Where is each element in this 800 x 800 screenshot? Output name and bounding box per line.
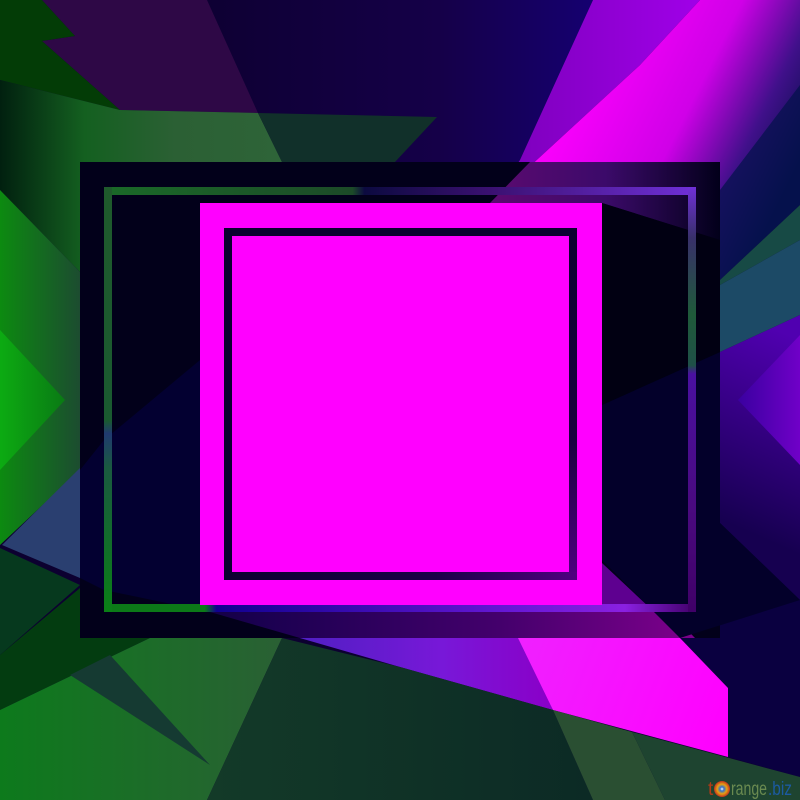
frame lower right purple wedge (602, 563, 650, 608)
lower left dark shard (0, 548, 80, 655)
frame navy diagonal right (602, 352, 800, 638)
top purple shard (490, 0, 700, 203)
top green band (0, 80, 282, 272)
bottom right green shard (632, 732, 800, 800)
bottom left green panel (0, 638, 282, 800)
frame navy diagonal left (80, 360, 200, 610)
lower purple band (210, 612, 553, 710)
lower right navy panel (680, 523, 800, 777)
right blue-green band (720, 240, 800, 352)
right teal shard (720, 205, 800, 285)
top dark teal band (258, 113, 437, 162)
left green panel (0, 190, 80, 545)
top left dark purple shard (42, 0, 258, 113)
logo domain biz: .biz (768, 779, 792, 800)
inner panel border (224, 228, 577, 580)
top centre navy panel (207, 0, 593, 165)
frame right upper dark panel (602, 203, 720, 405)
top right magenta beam (490, 0, 800, 300)
logo word range: range (731, 779, 767, 800)
watermark logo (708, 779, 792, 800)
frame lower band (210, 612, 695, 638)
dark right corner (720, 85, 800, 280)
logo letter t: t (708, 779, 714, 800)
lower magenta panel (518, 638, 728, 757)
top left green shard (0, 0, 120, 110)
outer dark frame (80, 162, 720, 638)
central magenta panel (200, 203, 602, 605)
inner line frame (104, 187, 696, 612)
left blue band (2, 468, 80, 578)
left bright green diamond (0, 330, 65, 470)
dark shadow shard (70, 655, 210, 765)
right purple panel (720, 315, 800, 600)
lower left green shard (0, 588, 150, 710)
logo wheel icon (714, 781, 730, 797)
bottom centre dark panel (207, 638, 593, 800)
right purple diamond (738, 335, 800, 465)
frame upper magenta tint (490, 162, 720, 240)
bottom right lighter shard (553, 710, 665, 800)
